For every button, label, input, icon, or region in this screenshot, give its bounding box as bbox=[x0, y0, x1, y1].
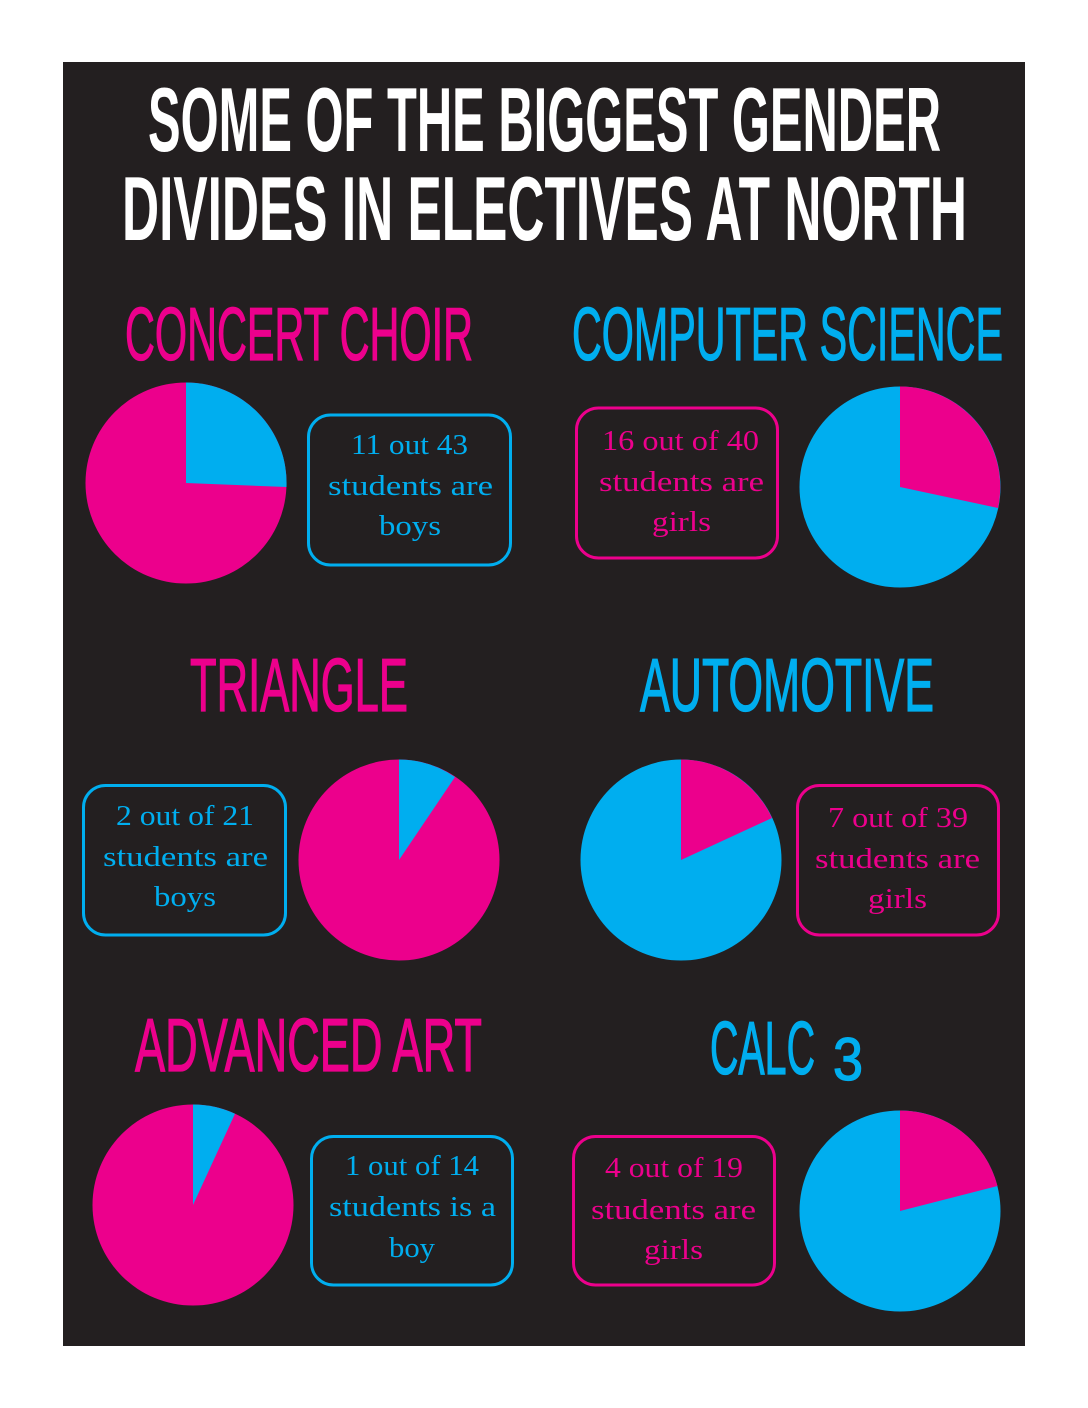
callout: 11 out of 43 boys: boys bbox=[379, 510, 441, 542]
callout: 1 out of 14 boy bbox=[312, 1136, 512, 1285]
heading: calc 3: CALC bbox=[710, 1006, 815, 1090]
callout: 4 out of 19 girls: girls bbox=[644, 1234, 703, 1266]
panel: computer science bbox=[572, 292, 1003, 588]
pie chart: triangle bbox=[298, 760, 500, 960]
callout: 2 out of 21 boys: boys bbox=[154, 881, 216, 913]
callout: 7 out of 39 girls bbox=[798, 786, 998, 935]
pie chart: calc 3 bbox=[800, 1110, 1000, 1312]
callout: 11 out of 43 boys bbox=[308, 415, 510, 565]
callout: 7 out of 39 girls: 7 out of 39 bbox=[828, 802, 968, 834]
callout: 4 out of 19 girls bbox=[574, 1136, 774, 1285]
pie chart: computer science bbox=[800, 386, 1000, 588]
callout: 2 out of 21 boys: students are bbox=[103, 841, 268, 873]
heading: advanced art: ADVANCED ART bbox=[135, 1003, 482, 1087]
callout: 1 out of 14 boy: 1 out of 14 bbox=[345, 1150, 480, 1182]
panel: concert choir bbox=[86, 292, 510, 584]
callout: 16 out of 40 girls: students are bbox=[599, 466, 764, 498]
callout: 16 out of 40 girls: 16 out of 40 bbox=[602, 425, 759, 457]
callout: 16 out of 40 girls: girls bbox=[652, 506, 711, 538]
title bbox=[122, 70, 967, 260]
panel: advanced art bbox=[92, 1003, 512, 1306]
panel: calc 3 bbox=[574, 1006, 1000, 1312]
pie chart: automotive bbox=[580, 760, 782, 960]
callout: 11 out of 43 boys: 11 out 43 bbox=[351, 429, 468, 461]
callout: 1 out of 14 boy: students is a bbox=[329, 1191, 496, 1223]
panel: automotive bbox=[580, 643, 998, 960]
pie chart: concert choir bbox=[86, 382, 287, 584]
callout: 7 out of 39 girls: girls bbox=[868, 883, 927, 915]
callout: 4 out of 19 girls: 4 out of 19 bbox=[605, 1152, 743, 1184]
callout: 2 out of 21 boys bbox=[84, 786, 286, 935]
callout: 4 out of 19 girls: students are bbox=[591, 1194, 756, 1226]
heading: triangle: TRIANGLE bbox=[190, 643, 408, 727]
callout: 2 out of 21 boys: 2 out of 21 bbox=[116, 800, 254, 832]
panel: triangle bbox=[84, 643, 500, 960]
callout: 11 out of 43 boys: students are bbox=[328, 470, 493, 502]
callout: 16 out of 40 girls bbox=[576, 408, 778, 558]
heading: concert choir: CONCERT CHOIR bbox=[125, 292, 473, 376]
callout: 1 out of 14 boy: boy bbox=[389, 1232, 436, 1264]
callout: 7 out of 39 girls: students are bbox=[815, 843, 980, 875]
heading: calc 3: 3 bbox=[833, 1026, 863, 1093]
pie chart: advanced art bbox=[92, 1104, 294, 1306]
